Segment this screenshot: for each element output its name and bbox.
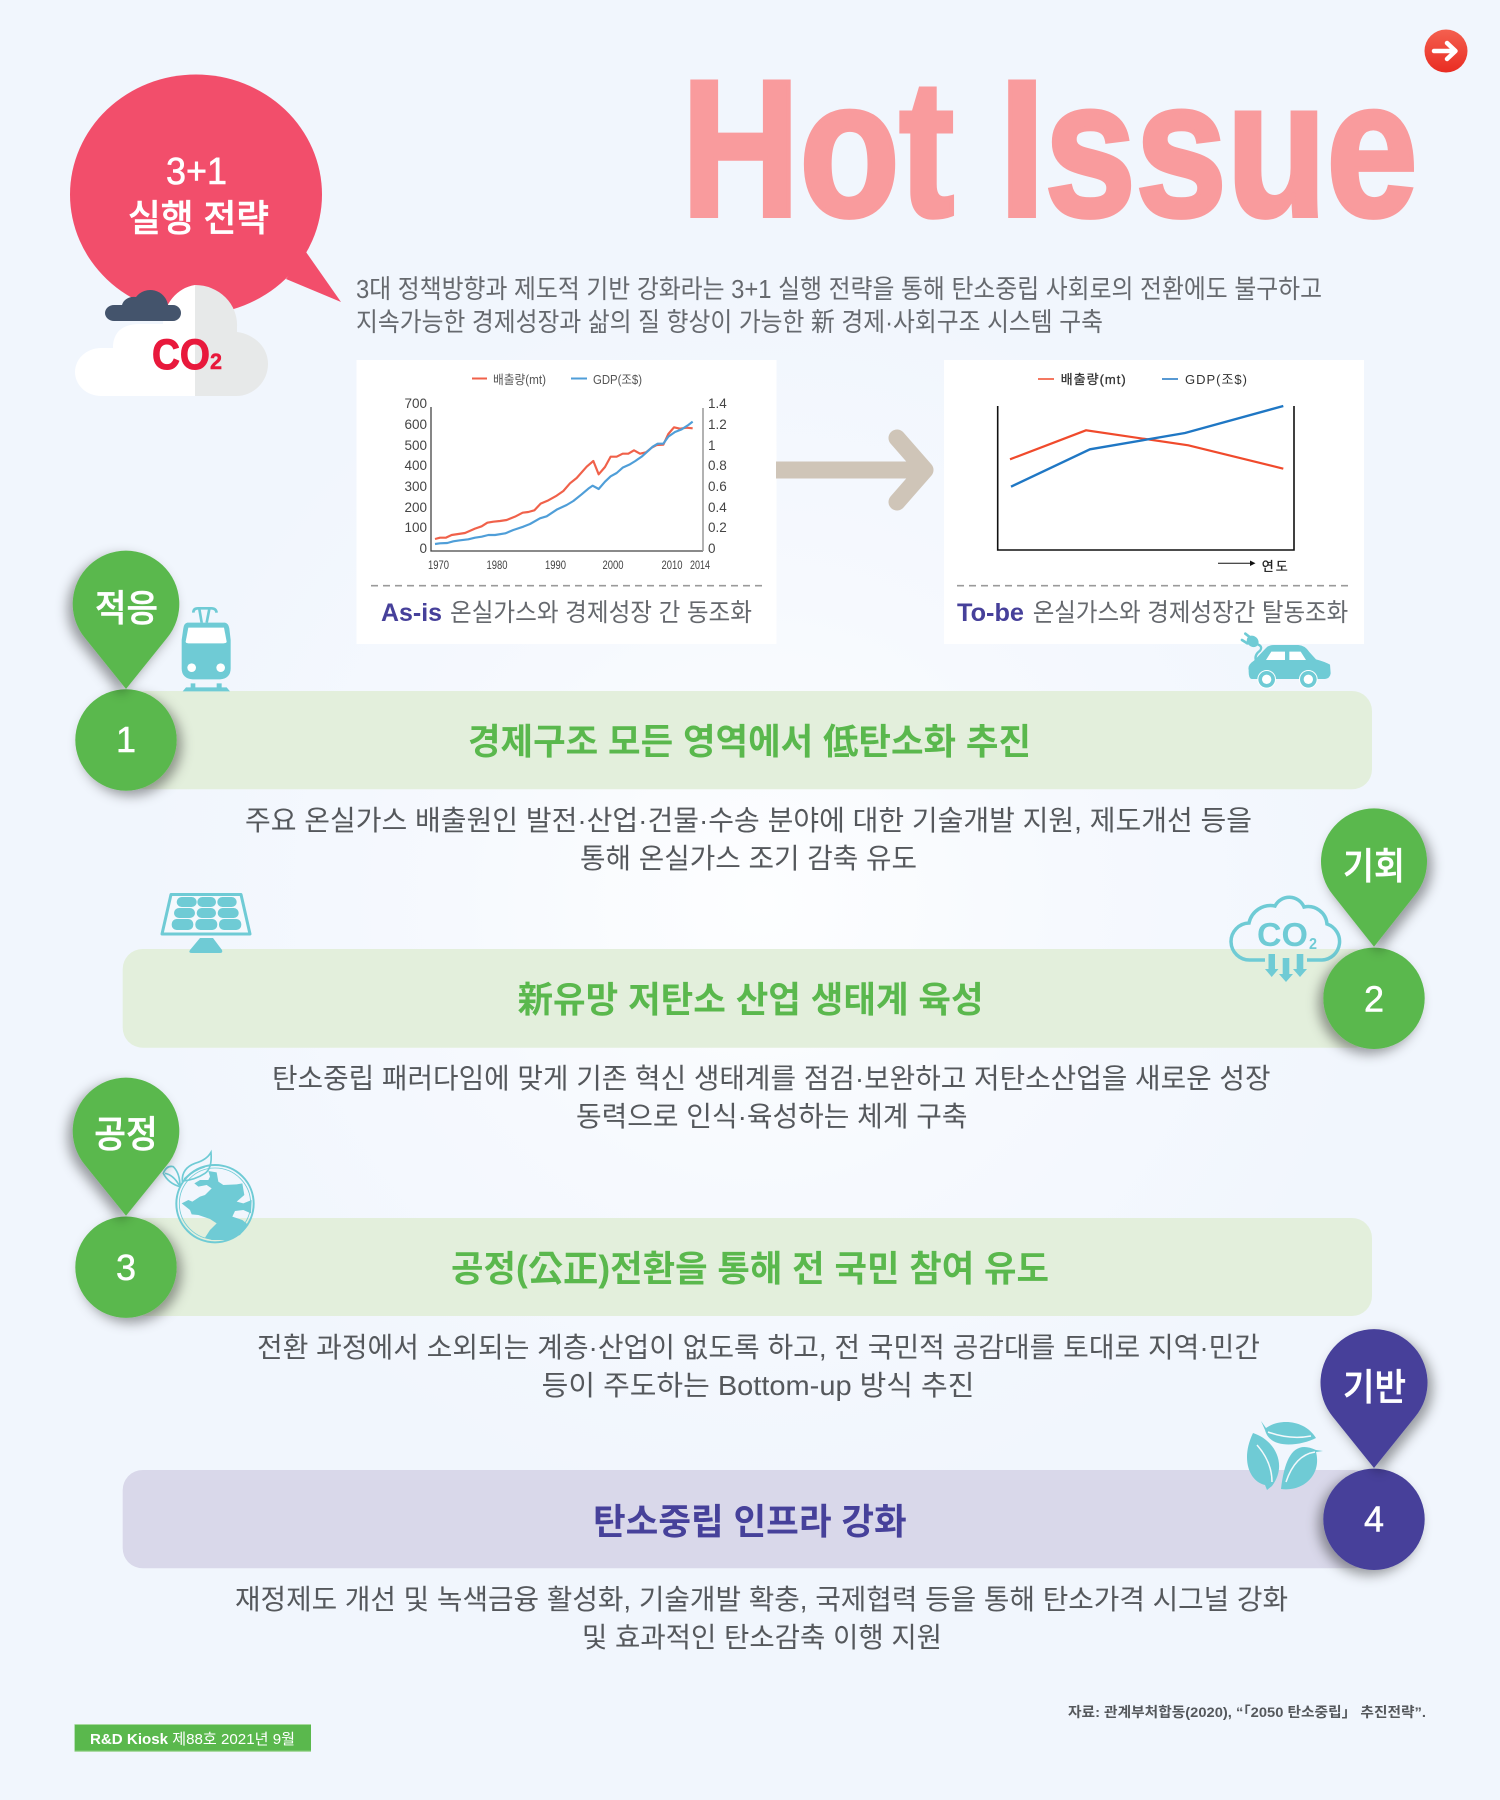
caption: to-be: 온실가스와 경제성장간 탈동조화 [1033, 599, 1348, 627]
speech bubble: 3+1 strategy: 실행 전략 [128, 198, 269, 239]
publication badge [75, 1724, 311, 1752]
bar 4: heading strip [123, 1470, 1374, 1568]
number circle 1: 1 [116, 719, 136, 760]
icon: CO2 cloud: CO [152, 331, 210, 379]
icon: CO2 reduction cloud: CO [1257, 916, 1308, 953]
line chart: emissions and GDP: 0 [419, 541, 427, 556]
line chart: decoupling [998, 406, 1294, 574]
description 3 [257, 1332, 1260, 1401]
pin: 기반 [1320, 1329, 1428, 1468]
description 2: 탄소중립 패러다임에 맞게 기존 혁신 생태계를 점검·보완하고 저탄소산업을 새로운 성장 [272, 1063, 1270, 1094]
line chart: emissions and GDP: 300 [404, 479, 427, 494]
line chart: emissions and GDP: 0.2 [708, 520, 727, 535]
marker 2: opportunity pin and number [1321, 808, 1427, 1049]
legend: to-be chart [1038, 372, 1247, 387]
description 2: 동력으로 인식·육성하는 체계 구축 [576, 1101, 968, 1132]
intro text block: 지속가능한 경제성장과 삶의 질 향상이 가능한 新 경제·사회구조 시스템 구축 [356, 307, 1103, 337]
pin: 적응 [73, 551, 179, 689]
description 2 [272, 1063, 1270, 1132]
bar 3: heading strip [126, 1218, 1372, 1316]
speech bubble: 3+1 strategy [70, 74, 341, 314]
line chart: emissions and GDP: 0.6 [708, 479, 727, 494]
line chart: emissions and GDP: 2014 [690, 558, 710, 572]
caption: as-is: 온실가스와 경제성장 간 동조화 [450, 599, 752, 627]
icon: next arrow button [1424, 30, 1468, 72]
icon: electric car [1242, 633, 1331, 689]
line chart: emissions and GDP: 1990 [545, 558, 566, 572]
icon: solar panel [162, 894, 250, 953]
bar 4: heading strip: 탄소중립 인프라 강화 [593, 1501, 907, 1542]
caption: to-be: To-be [957, 599, 1024, 627]
description 1 [245, 805, 1252, 874]
legend: to-be chart: GDP(조$) [1185, 372, 1247, 387]
caption: as-is: As-is [381, 599, 442, 627]
number circle 4 [1323, 1469, 1425, 1570]
marker 3: fairness pin and number [73, 1078, 179, 1318]
legend: as-is chart: 배출량(mt) [493, 373, 546, 387]
legend: to-be chart: 배출량(mt) [1061, 372, 1126, 387]
line chart: emissions and GDP: 1.4 [708, 396, 727, 411]
line chart: emissions and GDP: 2010 [662, 558, 683, 572]
line chart: emissions and GDP: 700 [404, 396, 427, 411]
bar 1: heading strip [126, 691, 1372, 789]
number circle 3: 3 [116, 1247, 136, 1288]
line chart: emissions and GDP: 1970 [428, 558, 449, 572]
description 4: 재정제도 개선 및 녹색금융 활성화, 기술개발 확충, 국제협력 등을 통해 탄소가격 시그널 강화 [235, 1584, 1288, 1615]
icon: globe with leaves [163, 1152, 254, 1242]
line chart: emissions and GDP: 0.4 [708, 500, 727, 515]
line chart: emissions and GDP: 1 [708, 438, 716, 453]
icon: CO2 reduction cloud: 2 [1309, 936, 1317, 953]
description 1: 주요 온실가스 배출원인 발전·산업·건물·수송 분야에 대한 기술개발 지원, 제도개선 등을 [245, 805, 1252, 836]
description 3: 등이 주도하는 Bottom-up 방식 추진 [542, 1370, 974, 1401]
legend: as-is chart [472, 373, 642, 387]
source note: 자료: 관계부처합동(2020), “「2050 탄소중립」 추진전략”. [1068, 1704, 1426, 1720]
intro text block: 3대 정책방향과 제도적 기반 강화라는 3+1 실행 전략을 통해 탄소중립 사회로의 전환에도 불구하고 [356, 274, 1322, 304]
pin: 공정: 공정 [94, 1114, 158, 1155]
bar 3: heading strip: 공정(公正)전환을 통해 전 국민 참여 유도 [451, 1248, 1049, 1289]
pin: 기회: 기회 [1343, 846, 1405, 887]
icon: tram [182, 608, 231, 691]
legend: as-is chart: GDP(조$) [593, 373, 642, 387]
bar 1: heading strip: 경제구조 모든 영역에서 低탄소화 추진 [468, 721, 1031, 762]
icon: CO2 cloud [75, 285, 268, 396]
bar 2: heading strip [123, 949, 1374, 1048]
description 3: 전환 과정에서 소외되는 계층·산업이 없도록 하고, 전 국민적 공감대를 토대로 지역·민간 [257, 1332, 1260, 1363]
line chart: emissions and GDP: 500 [404, 438, 427, 453]
panel: to-be chart [944, 360, 1364, 644]
pin: 적응: 적응 [95, 588, 158, 629]
intro text block [356, 274, 1322, 337]
line chart: emissions and GDP: 0.8 [708, 458, 727, 473]
number circle 4: 4 [1364, 1499, 1384, 1540]
number circle 2 [1323, 948, 1425, 1049]
line chart: emissions and GDP: 1.2 [708, 417, 727, 432]
line chart: emissions and GDP: 0 [708, 541, 716, 556]
publication badge: R&D Kiosk 제88호 2021년 9월 [90, 1731, 295, 1748]
line chart: emissions and GDP: 200 [404, 500, 427, 515]
speech bubble: 3+1 strategy: 3+1 [166, 151, 227, 193]
icon: three leaves [1247, 1421, 1323, 1490]
number circle 1 [75, 689, 177, 791]
pin: 기반: 기반 [1343, 1367, 1406, 1408]
icon: CO2 cloud: 2 [210, 349, 222, 374]
pin: 기회 [1321, 808, 1427, 947]
description 1: 통해 온실가스 조기 감축 유도 [580, 843, 917, 874]
line chart: decoupling: 연도 [1262, 559, 1288, 574]
number circle 3 [75, 1216, 177, 1318]
panel: as-is chart [356, 360, 776, 644]
line chart: emissions and GDP: 2000 [602, 558, 624, 572]
line chart: emissions and GDP: 100 [404, 520, 427, 535]
bar 2: heading strip: 新유망 저탄소 산업 생태계 육성 [518, 979, 984, 1020]
line chart: emissions and GDP: 400 [404, 458, 427, 473]
pin: 공정 [73, 1078, 179, 1216]
description 4 [235, 1584, 1288, 1653]
arrow: as-is to to-be [776, 438, 925, 502]
line chart: emissions and GDP: 600 [404, 417, 427, 432]
marker 1: adaptation pin and number [73, 551, 179, 791]
number circle 2: 2 [1364, 979, 1384, 1020]
description 4: 및 효과적인 탄소감축 이행 지원 [582, 1622, 942, 1653]
marker 4: foundation pin and number [1320, 1329, 1428, 1570]
line chart: emissions and GDP [404, 396, 727, 572]
line chart: emissions and GDP: 1980 [486, 558, 508, 572]
icon: CO2 reduction cloud [1231, 897, 1340, 982]
